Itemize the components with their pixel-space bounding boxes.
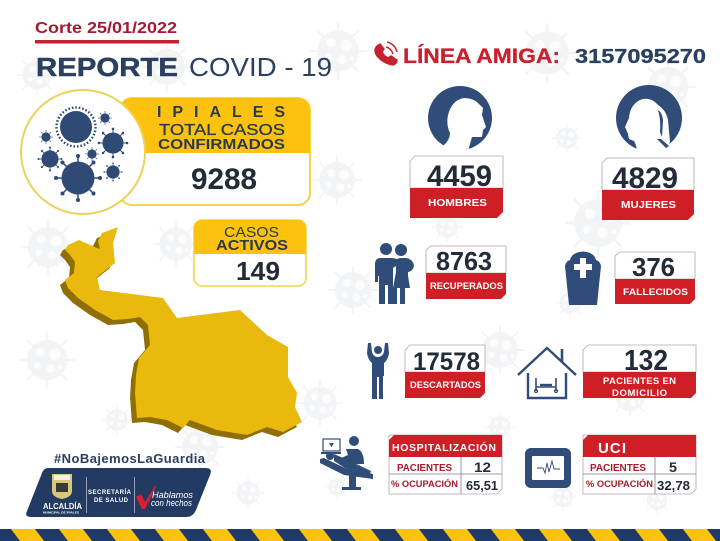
card: women <box>602 158 694 220</box>
card: home patients <box>583 345 696 399</box>
panel: total confirmed cases: 9288 <box>191 163 257 196</box>
table: ICU <box>583 435 696 494</box>
card: men <box>410 156 503 218</box>
logo band: Alcaldía, Secretaría de Salud: DE SALUD <box>94 498 129 504</box>
title: REPORTE <box>36 52 178 82</box>
panel heading: CONFIRMADOS <box>158 136 285 153</box>
table: ICU: PACIENTES <box>590 463 646 474</box>
panel: total confirmed cases <box>120 98 310 205</box>
card: men: 4459 <box>427 160 492 193</box>
panel heading <box>157 104 285 153</box>
panel: active cases: 149 <box>236 256 280 286</box>
icon: phone <box>375 42 397 65</box>
icon: virus circle <box>21 90 145 214</box>
panel: active cases: ACTIVOS <box>216 237 288 254</box>
logo band: Alcaldía, Secretaría de Salud <box>26 468 211 517</box>
icon: monitor <box>525 448 571 488</box>
card: recovered: RECUPERADOS <box>430 281 503 291</box>
card: recovered <box>426 246 506 299</box>
hotline: LÍNEA AMIGA: <box>403 45 560 68</box>
card: discarded <box>405 345 485 398</box>
map of Ipiales <box>60 227 302 440</box>
panel heading: IPIALES <box>157 104 285 121</box>
panel heading: TOTAL CASOS <box>159 122 285 139</box>
hotline <box>403 45 706 68</box>
table: ICU: % OCUPACIÓN <box>586 478 653 490</box>
hashtag: #NoBajemosLaGuardia <box>54 451 206 466</box>
card: home patients: PACIENTES EN <box>603 376 676 387</box>
icon: crest <box>52 474 72 499</box>
icon: house with bed <box>518 348 576 398</box>
card: home patients: DOMICILIO <box>612 388 667 399</box>
icon: person arms raised <box>367 343 389 399</box>
logo band: Alcaldía, Secretaría de Salud: con hechos <box>151 498 192 508</box>
card: deaths: 376 <box>632 252 675 282</box>
table: hospitalization <box>389 435 502 494</box>
card: deaths <box>615 252 695 304</box>
table: hospitalization: PACIENTES <box>397 463 452 474</box>
logo band: Alcaldía, Secretaría de Salud: MUNICIPAL DE IPIALES <box>43 510 79 514</box>
hotline: 3157095270 <box>575 46 706 68</box>
card: women: 4829 <box>612 162 678 195</box>
logo band: Alcaldía, Secretaría de Salud: ALCALDÍA <box>43 502 82 511</box>
card: discarded: 17578 <box>413 348 480 376</box>
table: hospitalization: 65,51 <box>466 478 498 493</box>
logo band: Alcaldía, Secretaría de Salud: SECRETARÍA <box>88 488 132 496</box>
table: hospitalization: 12 <box>474 459 491 475</box>
card: women: MUJERES <box>621 200 676 211</box>
card: recovered: 8763 <box>436 246 492 276</box>
panel: active cases <box>194 220 306 286</box>
table: hospitalization: HOSPITALIZACIÓN <box>392 441 496 454</box>
logo band: Alcaldía, Secretaría de Salud: Hablamos <box>152 490 193 500</box>
card: home patients: 132 <box>624 345 668 377</box>
date: Corte 25/01/2022 <box>35 20 179 44</box>
table: hospitalization: % OCUPACIÓN <box>391 478 458 490</box>
icon: tombstone <box>565 252 601 305</box>
icon: red check <box>136 486 156 509</box>
icon: woman head <box>616 85 682 152</box>
table: ICU: UCI <box>598 440 626 457</box>
icon: man head <box>428 86 492 151</box>
title: COVID - 19 <box>189 52 332 82</box>
card: deaths: FALLECIDOS <box>623 287 688 298</box>
card: men: HOMBRES <box>428 198 487 209</box>
panel: active cases: CASOS <box>224 224 279 241</box>
table: ICU: 5 <box>669 459 677 475</box>
table: ICU: 32,78 <box>657 478 690 493</box>
icon: couple <box>375 243 414 304</box>
hazard stripe band <box>0 529 720 541</box>
card: discarded: DESCARTADOS <box>410 380 481 390</box>
icon: patient and doctor <box>320 436 373 490</box>
title <box>36 52 332 82</box>
date: Corte 25/01/2022: Corte 25/01/2022 <box>35 20 177 37</box>
